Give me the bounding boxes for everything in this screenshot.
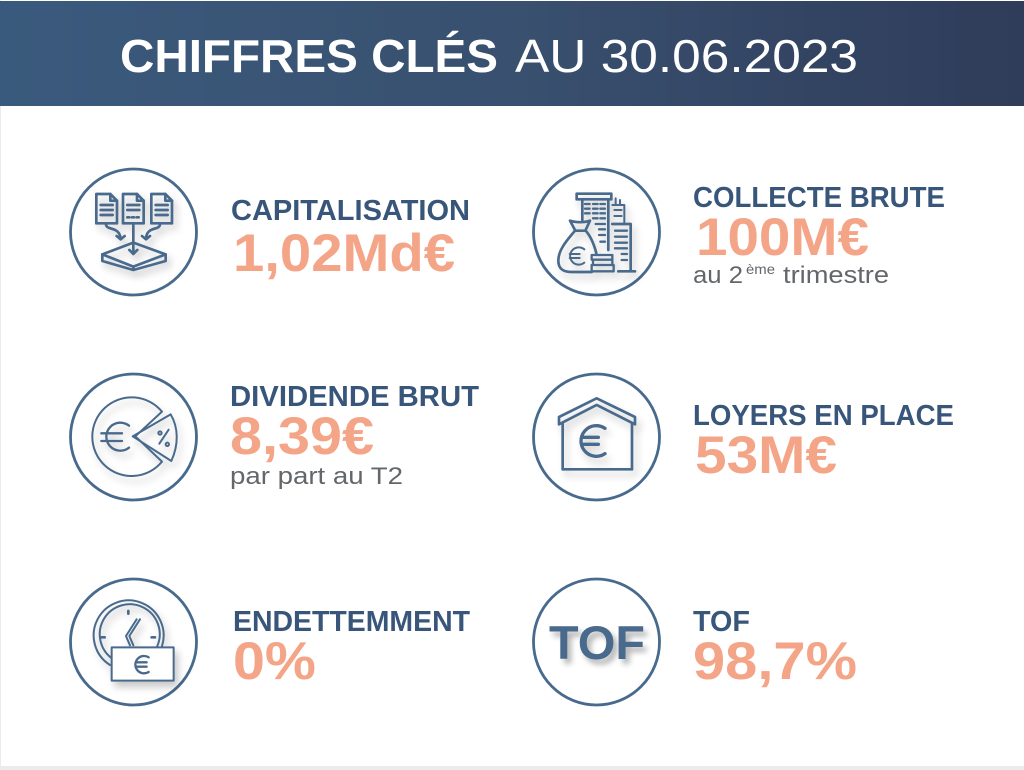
panel: collecte brute: [534, 169, 945, 295]
value: 100M€: [696, 208, 869, 267]
icon: TOF lettering: [534, 579, 660, 705]
subtext: ème: [746, 261, 775, 277]
title: CHIFFRES CLÉS: [120, 30, 498, 82]
panel: dividende brut: [70, 374, 480, 500]
header banner: [0, 1, 1024, 106]
value: 1,02Md€: [233, 224, 455, 283]
panel: endettement: [70, 579, 471, 705]
label: TOF: [693, 606, 750, 638]
label: ENDETTEMMENT: [233, 606, 471, 638]
label: COLLECTE BRUTE: [693, 182, 945, 214]
subtext: trimestre: [783, 262, 889, 289]
panel: capitalisation: [70, 169, 470, 295]
icon: pie chart with euro and percent: [70, 374, 196, 500]
icon: TOF lettering: TOF: [549, 616, 645, 669]
title: AU 30.06.2023: [515, 30, 858, 82]
panel: loyers en place: [534, 374, 954, 500]
label: DIVIDENDE BRUT: [230, 381, 480, 413]
value: 53M€: [695, 426, 837, 485]
icon: documents into box: [70, 169, 196, 295]
subtext: par part au T2: [230, 463, 403, 490]
value: 98,7%: [693, 632, 857, 691]
label: CAPITALISATION: [231, 195, 470, 227]
panel: TOF: [534, 579, 857, 705]
value: 0%: [233, 632, 316, 691]
icon: clock and banknote: [70, 579, 196, 705]
label: LOYERS EN PLACE: [693, 400, 954, 432]
value: 8,39€: [230, 407, 374, 466]
icon: house with euro: [534, 374, 660, 500]
icon: money bag and buildings: [534, 169, 660, 295]
subtext: au 2: [693, 262, 743, 289]
